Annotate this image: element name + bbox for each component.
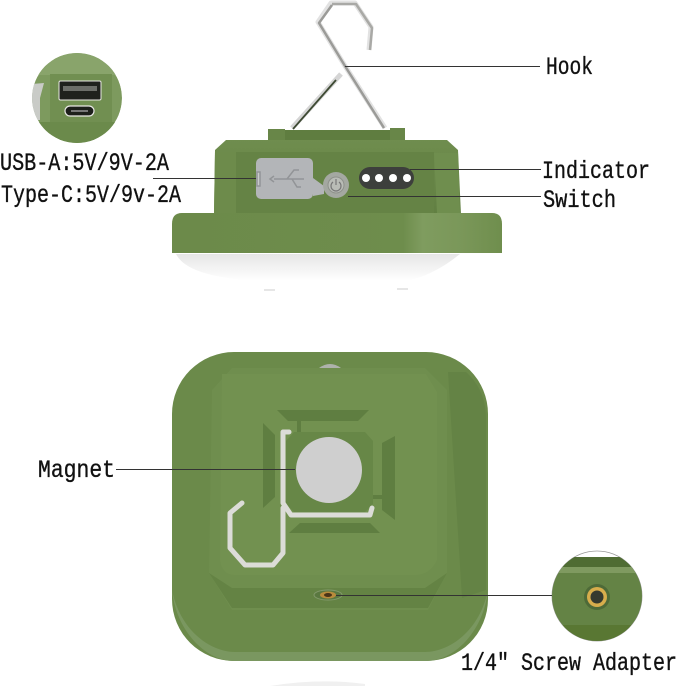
label: Hook: Hook [546,53,593,82]
base plate [172,352,488,661]
centre square [286,432,373,512]
bottom lantern back view [172,352,488,686]
inset: USB ports [32,53,122,147]
power switch [323,172,349,198]
switch bump [319,364,341,368]
magnet [296,437,362,503]
inset: screw adapter [552,551,642,641]
lantern body [214,140,461,215]
screw hole [314,590,342,600]
bottom marks [270,681,365,686]
mounting trapezoids [263,410,395,533]
body top tabs [268,130,405,141]
hook folded [230,432,372,565]
light diffuser shadow [176,254,460,281]
label: Type-C: Type-C:5V/9v-2A [1,181,181,210]
base flange [172,213,502,253]
USB cover [256,158,324,199]
label: Indicator: Indicator [542,157,650,186]
label: USB-A: USB-A:5V/9V-2A [0,149,169,178]
hook [292,3,385,129]
label: Magnet: Magnet [38,456,115,485]
raised block [209,368,447,610]
indicator lights [359,167,414,189]
leader lines [116,66,552,596]
top lantern side view [172,3,502,291]
label: Switch: Switch [543,186,616,215]
